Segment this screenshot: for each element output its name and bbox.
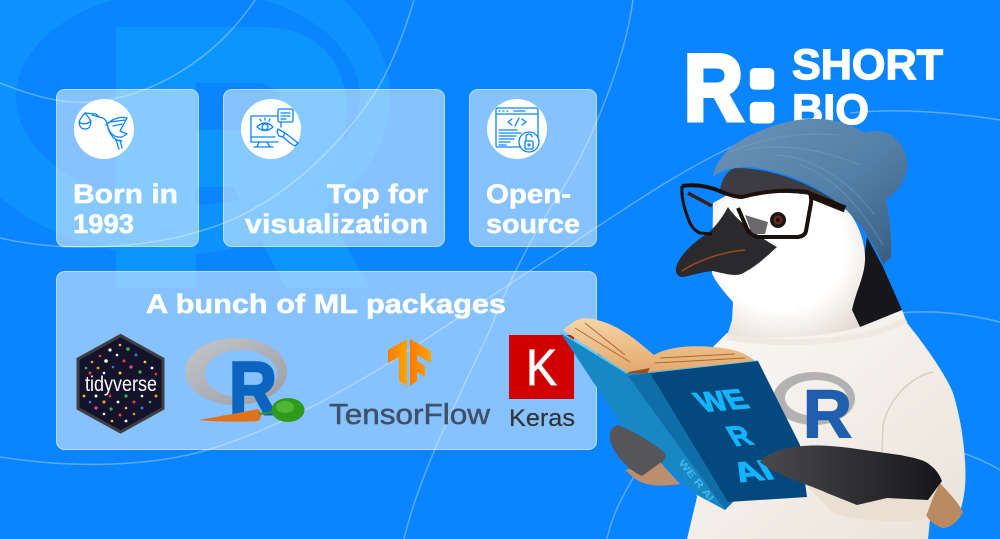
glasses — [682, 185, 845, 237]
title: R — [684, 35, 743, 140]
sleeve underside — [925, 483, 963, 528]
cover title WE R AI — [689, 384, 780, 488]
shirt logo: R — [803, 376, 852, 452]
beak mouth line — [682, 250, 745, 271]
logo: TensorFlow — [329, 339, 491, 431]
back cover — [560, 332, 728, 510]
body and shirt — [680, 310, 966, 539]
left flipper — [610, 425, 666, 476]
beak — [676, 207, 777, 277]
logo: R caret — [185, 338, 304, 430]
logo: TensorFlow: TensorFlow — [329, 399, 491, 431]
book pages — [563, 318, 755, 380]
beanie hat — [713, 119, 907, 265]
panel: born in 1993 — [56, 90, 198, 246]
spine notch — [628, 368, 650, 380]
spine — [628, 373, 733, 510]
logo: R caret: R — [229, 346, 277, 430]
panel: top for visualization: Top for — [327, 179, 429, 209]
logo: Keras — [509, 335, 575, 432]
panel: open-source: Open- — [486, 179, 571, 209]
hat knit texture — [730, 134, 883, 245]
shirt logo — [773, 372, 855, 452]
eye — [745, 212, 786, 234]
black neck — [852, 237, 902, 327]
head — [712, 188, 865, 338]
left hand skin — [625, 462, 680, 486]
panel heading: A bunch of ML packages — [146, 289, 506, 319]
panel: top for visualization — [224, 90, 444, 246]
title — [684, 35, 943, 140]
logo: Keras: K — [526, 339, 557, 396]
open book — [560, 318, 807, 510]
front cover — [650, 361, 807, 502]
logo: tidyverse — [78, 336, 163, 432]
faint R logo watermark — [0, 0, 390, 288]
shirt collar — [727, 320, 906, 342]
icon: monitor with eye and brush — [251, 109, 298, 147]
sleeve seam — [882, 372, 933, 452]
spine title: WE R AI — [676, 458, 716, 504]
crown under hat — [720, 168, 845, 208]
title: : — [745, 37, 779, 139]
page lines — [575, 323, 745, 363]
right flipper — [760, 445, 942, 505]
panel: open-source: source — [486, 209, 580, 239]
logo: tidyverse: tidyverse — [85, 373, 157, 396]
cover title WE R AI: R — [721, 420, 759, 452]
title: BIO — [792, 86, 869, 134]
cover title WE R AI: WE — [689, 384, 755, 418]
panel: top for visualization: visualization — [245, 209, 428, 239]
panel: born in 1993: 1993 — [73, 209, 134, 239]
cover title WE R AI: AI — [726, 455, 780, 488]
panel: open-source — [470, 90, 596, 246]
panel: born in 1993: Born in — [73, 179, 178, 209]
title: SHORT — [792, 41, 943, 89]
logo: Keras: Keras — [509, 405, 575, 432]
cover edges — [560, 332, 758, 373]
icon: code window with lock — [496, 108, 539, 152]
right flipper underside — [805, 484, 934, 521]
icon: stork carrying bundle — [79, 113, 127, 149]
panel: ML packages — [56, 272, 596, 450]
penguin illustration — [560, 119, 966, 539]
